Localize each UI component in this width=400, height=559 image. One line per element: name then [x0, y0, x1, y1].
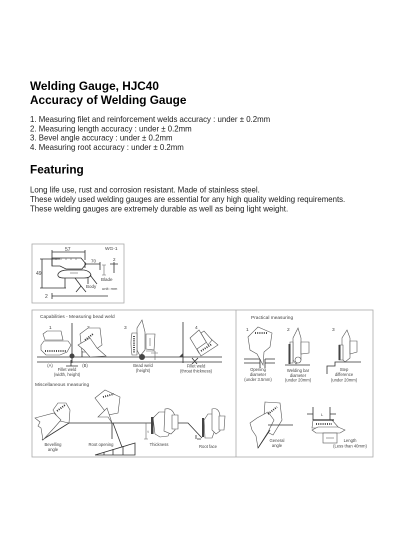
title: Accuracy of Welding Gauge [30, 93, 187, 107]
diagram: thickness: t [148, 429, 150, 434]
gauge dimension drawing: 49 [36, 271, 42, 277]
panel: gauge dimensions WG-1 [32, 244, 124, 303]
gauge dimension drawing [36, 247, 118, 300]
gauge dimension drawing: unit: mm [102, 286, 118, 291]
diagram: bevelling angle [35, 403, 70, 452]
diagram 3: bead weld: Bead weld [133, 363, 153, 368]
diagram 4: throat weld: (throat thickness) [180, 368, 213, 374]
accuracy list [30, 115, 271, 152]
bead weld diagrams [37, 320, 222, 377]
gauge dimension drawing: 2 [113, 257, 116, 262]
heading: practical measuring: Practical measuring [251, 315, 293, 321]
diagram: step difference: difference [335, 372, 354, 377]
features text: These widely used welding gauges are essential for any high quality welding requirements. [30, 195, 345, 204]
diagram: general angle: angle [272, 443, 283, 448]
heading: miscellaneous measuring: Miscellaneous measuring [35, 382, 89, 388]
diagram 1: fillet weld [41, 323, 88, 377]
diagram: thickness [144, 409, 178, 447]
diagram: root face [196, 409, 225, 449]
diagram: welding bar diameter: 2 [287, 327, 290, 333]
diagram 1: fillet weld: (A) [47, 363, 53, 368]
features text [30, 185, 345, 213]
gauge dimension drawing: Blade [101, 277, 113, 282]
diagram 4: throat weld: 4 [195, 325, 198, 331]
heading: Featuring: Featuring [30, 162, 84, 176]
diagram: opening diameter: (under 3.5mm) [244, 377, 272, 382]
diagram: opening diameter [244, 327, 275, 382]
diagram 1: fillet weld: (B) [82, 363, 88, 368]
diagram: bevelling angle: Bevelling [44, 442, 62, 447]
diagram: general angle [250, 402, 293, 448]
diagram 4: throat weld: Fillet weld [187, 364, 206, 368]
diagram: general angle: General [270, 438, 285, 443]
diagram: length [307, 407, 367, 448]
heading: capabilities: Capabilities - Measuring bead weld [40, 314, 115, 320]
gauge dimension drawing: 57 [65, 247, 71, 253]
diagram: step difference: Step [340, 367, 349, 372]
accuracy list: 4. Measuring root accuracy : under ± 0.2mm [30, 143, 184, 152]
gauge dimension drawing: Body [86, 284, 97, 289]
diagram: root face: Root face [199, 444, 218, 449]
diagram: welding bar diameter: diameter [290, 373, 307, 378]
gauge dimension drawing: 2 [45, 294, 48, 300]
panel: capabilities and measuring examples [32, 310, 373, 457]
diagram: step difference: (under 20mm) [331, 378, 358, 382]
diagram: opening diameter: Opening [250, 367, 267, 372]
accuracy list: 1. Measuring filet and reinforcement welds accuracy : under ± 0.2mm [30, 115, 271, 124]
diagram 1: fillet weld: Fillet weld [58, 367, 77, 372]
diagram: opening diameter: diameter [250, 372, 267, 377]
accuracy list: 2. Measuring length accuracy : under ± 0.2mm [30, 124, 192, 133]
gauge dimension drawing: 70 [91, 258, 97, 264]
diagram 1: fillet weld: 1 [49, 325, 52, 331]
diagram: step difference: 3 [332, 327, 335, 333]
diagram: step difference [327, 327, 361, 382]
diagram 3: bead weld: (height) [136, 368, 151, 373]
features text: These welding gauges are extremely durable as well as being light weight. [30, 204, 288, 213]
miscellaneous diagrams [35, 390, 225, 455]
diagram 4: throat weld [179, 322, 218, 374]
title [30, 79, 187, 107]
features text: Long life use, rust and corrosion resistant. Made of stainless steel. [30, 185, 260, 194]
accuracy list: 3. Bevel angle accuracy : under ± 0.2mm [30, 134, 173, 143]
label: model: WG-1 [105, 246, 118, 252]
diagram 2: fillet gauge: 2 [87, 325, 90, 331]
diagram 1: fillet weld: (width, height) [54, 372, 81, 377]
practical diagrams [244, 327, 367, 448]
diagram: root opening: Root opening [89, 442, 114, 447]
diagram: length: L [321, 412, 324, 417]
diagram: welding bar diameter: (under 20mm) [285, 378, 312, 382]
diagram: bevelling angle: angle [48, 447, 59, 452]
diagram 3: bead weld [124, 320, 158, 373]
diagram 3: bead weld: 3 [124, 325, 127, 331]
diagram: welding bar diameter [285, 327, 312, 382]
diagram: root opening [89, 390, 135, 455]
diagram 2: fillet gauge [78, 325, 106, 357]
diagram: length: Length [344, 438, 357, 443]
diagram: thickness: Thickness [150, 442, 168, 447]
diagram: length: (Less than 40mm) [333, 444, 367, 448]
diagram: welding bar diameter: Welding bar [287, 368, 310, 373]
diagram: opening diameter: 1 [246, 327, 249, 333]
title: Welding Gauge, HJC40 [30, 79, 159, 93]
